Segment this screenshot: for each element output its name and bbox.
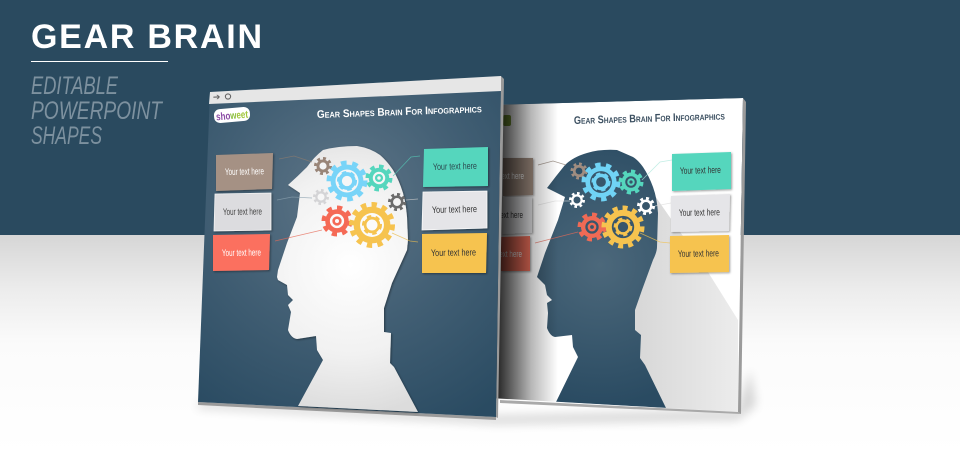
back gear: brown <box>572 164 586 178</box>
back gear: white right <box>638 198 654 214</box>
back box: red: Your text here <box>483 249 522 260</box>
front box: yellow: Your text here <box>431 247 476 259</box>
front box: brown: Your text here <box>225 166 264 178</box>
back slide shade from front slide <box>496 104 555 402</box>
back box: yellow: Your text here <box>678 248 719 260</box>
front gear: dark grey <box>389 194 405 210</box>
subtitle: EDITABLE <box>31 72 118 100</box>
back gear: white left <box>570 193 584 207</box>
front box: red <box>213 234 270 271</box>
floor shadow under slides <box>198 370 756 424</box>
back slide right edge <box>738 98 746 414</box>
front connector lines <box>275 156 420 242</box>
back slide logo fragment <box>503 115 511 126</box>
title: GEAR BRAIN <box>31 18 262 56</box>
front slide heading: Gear Shapes Brain For Infographics <box>317 103 483 121</box>
front box: yellow <box>422 233 487 273</box>
back box: teal <box>672 152 731 191</box>
back box: grey <box>502 197 534 236</box>
subtitle <box>31 72 163 150</box>
back slide sheet <box>498 98 743 328</box>
background: grey floor <box>0 235 960 453</box>
back box: brown: Your text here <box>485 171 524 182</box>
front box: grey: Your text here <box>223 207 262 218</box>
front gear: red <box>324 208 350 234</box>
back slide long cast shadow <box>634 197 738 412</box>
back box: brown <box>503 158 536 198</box>
background: navy wall <box>0 0 960 235</box>
front box: white: Your text here <box>432 204 477 216</box>
front slide sheet <box>198 76 501 417</box>
front box: white <box>422 191 487 230</box>
front box: red: Your text here <box>222 248 261 259</box>
subtitle: POWERPOINT <box>31 97 163 125</box>
back gear: yellow <box>605 209 641 245</box>
front box: teal <box>423 147 488 187</box>
front slide edge <box>198 76 504 420</box>
back box: white <box>671 194 730 232</box>
front gear: light grey <box>314 190 328 204</box>
front box: grey <box>214 193 271 231</box>
back box: yellow <box>670 235 729 273</box>
front gear: brown <box>315 158 331 174</box>
front gear: teal <box>368 167 390 189</box>
browser reload icon <box>225 94 231 99</box>
front box: teal: Your text here <box>433 161 477 173</box>
browser arrow icon: ➔ <box>213 92 221 102</box>
back box: teal: Your text here <box>680 165 721 177</box>
panel: back slide, white version <box>483 98 743 413</box>
panel: front slide, navy version <box>198 76 504 420</box>
back head silhouette <box>537 150 666 408</box>
front box: brown <box>216 153 273 191</box>
back box: grey: Your text here <box>484 210 523 221</box>
subtitle: SHAPES <box>31 122 102 150</box>
back gear: red <box>580 215 604 239</box>
front gear: yellow <box>352 205 392 245</box>
back gear: blue <box>584 165 618 199</box>
back gear: teal <box>620 172 642 192</box>
front head silhouette <box>277 146 418 412</box>
title underline <box>31 61 168 62</box>
back connector lines <box>535 160 672 243</box>
logo: showeet <box>216 109 249 123</box>
front gear: blue <box>329 163 365 199</box>
back slide bottom edge <box>500 400 741 414</box>
back box: red <box>501 236 532 274</box>
back slide heading: Gear Shapes Brain For Infographics <box>574 111 726 127</box>
browser bar <box>209 76 501 104</box>
back box: white: Your text here <box>679 207 720 219</box>
